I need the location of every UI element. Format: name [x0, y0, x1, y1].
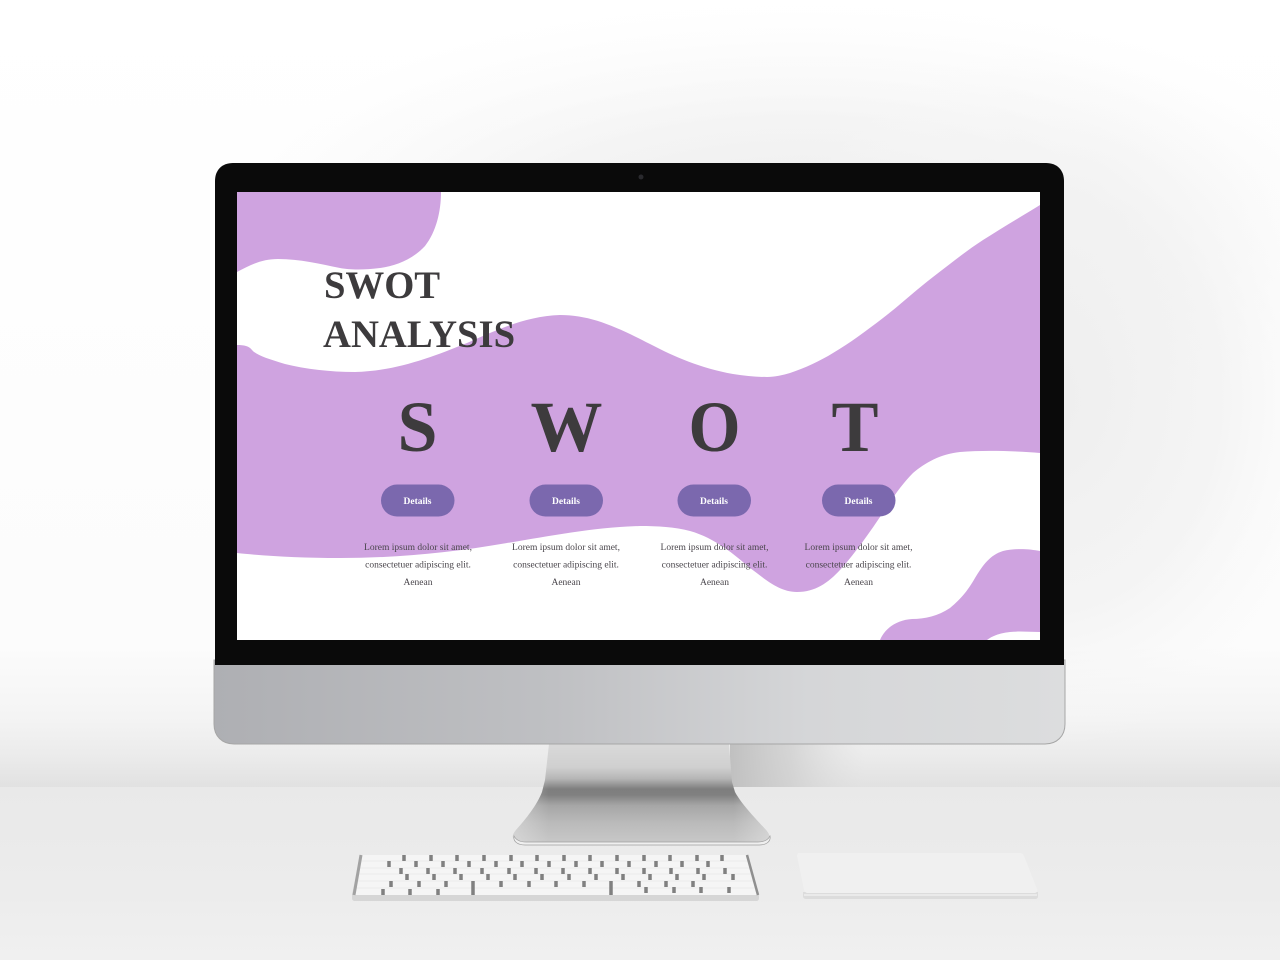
button: Details: Details	[552, 497, 580, 507]
letter W: W	[530, 387, 602, 467]
description: Lorem ipsum dolor sit amet,	[364, 543, 472, 553]
button: Details: Details	[404, 497, 432, 507]
description: Aenean	[403, 578, 433, 588]
title	[323, 272, 514, 348]
purple blob: bottom right	[880, 549, 1040, 640]
description	[805, 543, 912, 588]
description: consectetuer adipiscing elit.	[513, 560, 619, 570]
description: Aenean	[700, 578, 729, 588]
button: Details	[530, 484, 603, 516]
desk surface	[0, 787, 1280, 960]
column: T	[804, 404, 912, 585]
description	[364, 543, 472, 588]
title: ANALYSIS	[323, 314, 515, 356]
description: consectetuer adipiscing elit.	[365, 560, 471, 570]
column: S	[364, 387, 472, 588]
letter S: S	[397, 387, 438, 467]
description	[512, 543, 620, 588]
webcam	[638, 174, 644, 180]
monitor chin	[214, 660, 1065, 744]
monitor body	[214, 163, 1065, 744]
description: Lorem ipsum dolor sit amet,	[805, 543, 912, 553]
description: consectetuer adipiscing elit.	[662, 560, 767, 570]
button: Details	[822, 484, 896, 516]
button: Details	[678, 484, 751, 516]
button: Details: Details	[700, 497, 728, 507]
description: Aenean	[844, 578, 873, 588]
purple wave: main band	[237, 205, 1040, 592]
keyboard	[352, 855, 759, 901]
button: Details	[381, 484, 454, 516]
monitor stand	[513, 744, 770, 845]
description	[661, 543, 768, 588]
letter T: T	[832, 387, 878, 467]
screen background	[237, 192, 1040, 640]
column: O	[661, 387, 768, 588]
monitor bezel	[215, 163, 1064, 665]
slide screen	[237, 192, 1040, 640]
description: consectetuer adipiscing elit.	[806, 560, 911, 570]
description: Lorem ipsum dolor sit amet,	[512, 543, 620, 553]
column: W	[512, 404, 620, 585]
letter O: O	[688, 387, 740, 467]
description: Aenean	[551, 578, 581, 588]
description: Lorem ipsum dolor sit amet,	[661, 543, 768, 553]
button: Details: Details	[845, 497, 873, 507]
trackpad	[797, 853, 1038, 899]
purple blob: top left	[237, 192, 441, 272]
title: SWOT	[324, 265, 440, 307]
wall shadow behind stand	[730, 744, 865, 787]
